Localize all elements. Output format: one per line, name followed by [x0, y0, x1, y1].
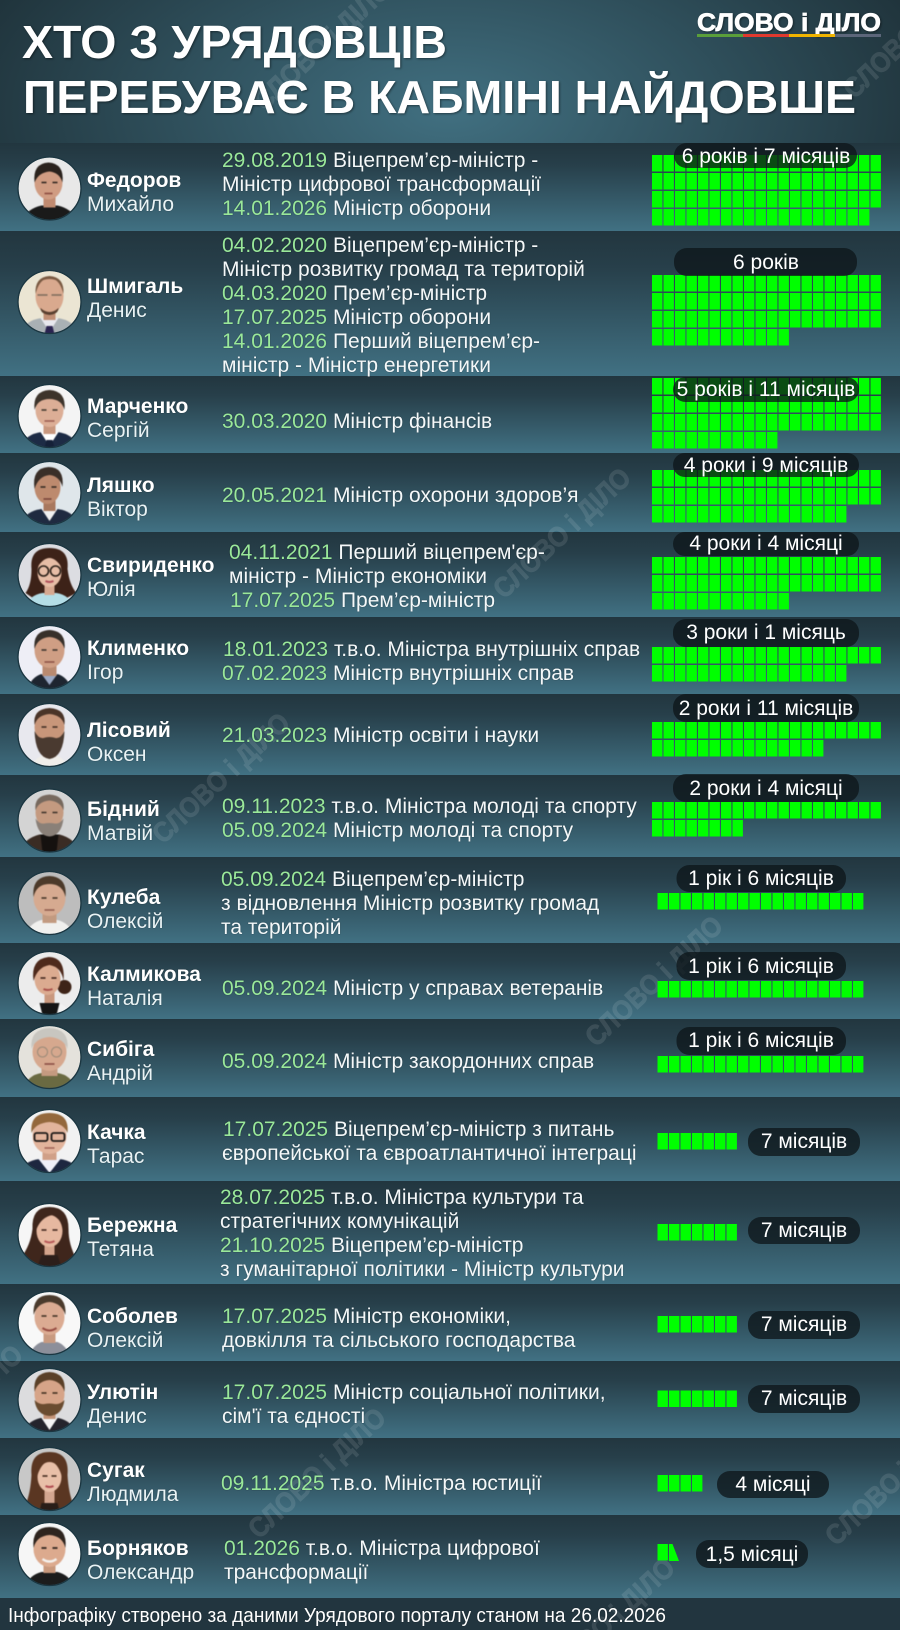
name — [87, 395, 188, 442]
tenure bar: 7 months: 7 місяців — [761, 1219, 847, 1242]
name: Тарас — [87, 1145, 144, 1168]
name: Бережна — [87, 1214, 178, 1237]
name — [87, 886, 163, 933]
row: Улютін — [17, 1368, 860, 1432]
appointments: 17.07.2025 Віцепрем’єр-міністр з питань — [223, 1118, 615, 1141]
appointments: міністр - Міністр енергетики — [222, 354, 491, 377]
appointments: сім'ї та єдності — [222, 1405, 365, 1428]
name — [87, 719, 171, 766]
tenure bar: 28 months: 2 роки і 4 місяці — [689, 777, 843, 800]
name: Кулеба — [87, 886, 161, 909]
row: Качка — [17, 1109, 860, 1174]
name: Соболев — [87, 1305, 178, 1328]
tenure bar: 7 months — [658, 1311, 860, 1339]
name: Віктор — [87, 498, 148, 521]
tenure bar: 28 months — [652, 774, 881, 828]
row: Калмикова — [17, 951, 864, 1016]
name: Оксен — [87, 743, 147, 766]
appointments: 17.07.2025 Міністр соціальної політики, — [222, 1381, 606, 1404]
appointments: 28.07.2025 т.в.о. Міністра культури та — [220, 1186, 584, 1209]
row: Борняков — [18, 1522, 808, 1586]
tenure bar: 71 months — [652, 377, 881, 440]
tenure bar: 57 months — [652, 453, 881, 514]
appointments — [222, 795, 637, 842]
watermarks: СЛОВО і ДІЛО — [487, 462, 637, 604]
appointments: 05.09.2024 Міністр молоді та спорту — [222, 819, 574, 842]
name: Денис — [87, 299, 147, 322]
appointments: 05.09.2024 Віцепрем’єр-міністр — [221, 868, 524, 891]
row: Бідний — [0, 774, 900, 857]
name: Шмигаль — [87, 275, 183, 298]
tenure bar: 79 months — [652, 143, 881, 217]
appointments — [220, 1186, 624, 1281]
appointments: 04.02.2020 Віцепрем’єр-міністр - — [222, 234, 538, 257]
tenure bar: 1.5 months: 1,5 місяці — [706, 1543, 798, 1566]
appointments — [224, 1537, 540, 1584]
tenure bar: 7 months — [658, 1385, 860, 1413]
appointments — [221, 868, 599, 939]
name: Качка — [87, 1121, 146, 1144]
appointments: 17.07.2025 Міністр оборони — [222, 306, 491, 329]
name: Сергій — [87, 419, 150, 442]
appointments — [222, 638, 640, 685]
tenure bar: 18 months — [658, 865, 864, 901]
tenure bar: 52 months — [652, 532, 881, 601]
row: Ляшко — [17, 453, 881, 526]
footer source note: Інфографіку створено за даними Урядового порталу станом на 26.02.2026 — [8, 1605, 666, 1627]
name: Свириденко — [87, 554, 214, 577]
name: Улютін — [87, 1381, 158, 1404]
row: Марченко — [17, 377, 881, 448]
avatar: Сугак — [18, 1447, 82, 1511]
appointments: та територій — [221, 916, 342, 939]
appointments: 29.08.2019 Віцепрем’єр-міністр - — [222, 149, 538, 172]
name — [87, 1381, 158, 1428]
avatar: Сибіга — [18, 1025, 82, 1089]
appointments: 04.11.2021 Перший віцепрем'єр- — [229, 541, 545, 564]
appointments: 01.2026 т.в.о. Міністра цифрової — [224, 1537, 540, 1560]
row: Бережна — [17, 1188, 860, 1281]
name: Андрій — [87, 1062, 153, 1085]
tenure bar: 4 months — [658, 1471, 829, 1498]
watermarks: СЛОВО і ДІЛО — [242, 1402, 392, 1544]
tenure bar: 37 months — [652, 619, 881, 673]
tenure bar: 72 months — [652, 248, 881, 337]
tenure bar: 18 months: 1 рік і 6 місяців — [688, 955, 834, 978]
tenure bar: 7 months: 7 місяців — [761, 1130, 847, 1153]
appointments: стратегічних комунікацій — [220, 1210, 459, 1233]
appointments — [229, 541, 545, 612]
avatar: Ляшко — [18, 461, 82, 525]
tenure bar: 1.5 months — [658, 1540, 808, 1568]
title: ХТО З УРЯДОВЦІВ — [22, 16, 447, 68]
name: Людмила — [87, 1483, 179, 1506]
name: Олексій — [87, 910, 163, 933]
appointments — [222, 149, 541, 220]
appointments: Міністр цифрової трансформації — [222, 173, 541, 196]
name: Бідний — [87, 798, 160, 821]
name — [87, 1459, 179, 1506]
title — [22, 16, 856, 123]
name: Олександр — [87, 1561, 194, 1584]
appointments — [222, 234, 585, 377]
row: Свириденко — [0, 532, 900, 617]
avatar: Клименко — [18, 625, 82, 689]
avatar: Лісовий — [18, 703, 82, 767]
avatar: Марченко — [18, 384, 82, 448]
appointments — [222, 1305, 576, 1352]
appointments: 17.07.2025 Прем’єр-міністр — [230, 589, 495, 612]
appointments: 21.10.2025 Віцепрем’єр-міністр — [220, 1234, 523, 1257]
appointments: європейської та євроатлантичної інтеграці — [222, 1142, 637, 1165]
avatar: Бідний — [18, 788, 82, 852]
row: Шмигаль — [0, 231, 900, 377]
tenure bar: 18 months: 1 рік і 6 місяців — [688, 1029, 834, 1052]
watermarks: СЛОВО і ДІЛО — [579, 910, 729, 1052]
row: Клименко — [17, 619, 881, 690]
appointments: 04.03.2020 Прем’єр-міністр — [222, 282, 487, 305]
tenure bar: 7 months: 7 місяців — [761, 1313, 847, 1336]
name — [87, 474, 155, 521]
appointments: 09.11.2023 т.в.о. Міністра молоді та спорту — [222, 795, 637, 818]
avatar: Борняков — [18, 1522, 82, 1586]
avatar: Федоров — [18, 156, 82, 220]
tenure bar: 7 months — [658, 1217, 860, 1244]
watermarks: СЛОВО і ДІЛО — [146, 707, 296, 849]
appointments: з гуманітарної політики - Міністр культури — [220, 1258, 624, 1281]
logo: Слово і Діло: СЛОВО і ДІЛО — [697, 9, 881, 37]
avatar: Кулеба — [18, 871, 82, 935]
name: Борняков — [87, 1537, 189, 1560]
name: Наталія — [87, 987, 163, 1010]
appointments — [222, 1118, 637, 1165]
name: Олексій — [87, 1329, 163, 1352]
tenure bar: 52 months: 4 роки і 4 місяці — [689, 532, 843, 555]
tenure bar: 18 months — [658, 1027, 864, 1064]
row: Соболев — [17, 1291, 860, 1356]
name — [87, 275, 183, 322]
name: Юлія — [87, 578, 136, 601]
tenure bar: 57 months: 4 роки і 9 місяців — [684, 454, 848, 477]
row: Кулеба — [17, 865, 864, 939]
row: Лісовий — [17, 694, 881, 768]
avatar: Бережна — [18, 1203, 82, 1267]
name — [87, 798, 160, 845]
name: Федоров — [87, 169, 181, 192]
avatar: Калмикова — [18, 951, 82, 1015]
row: Федоров — [0, 143, 900, 231]
tenure bar: 4 months: 4 місяці — [735, 1473, 811, 1496]
name — [87, 1214, 178, 1261]
name: Тетяна — [87, 1238, 154, 1261]
avatar: Свириденко — [18, 543, 82, 607]
tenure bar: 18 months — [658, 952, 864, 989]
appointments: 18.01.2023 т.в.о. Міністра внутрішніх справ — [223, 638, 640, 661]
footer background — [0, 1598, 900, 1630]
name — [87, 1121, 146, 1168]
name: Марченко — [87, 395, 188, 418]
appointments: 20.05.2021 Міністр охорони здоров’я — [222, 484, 579, 507]
appointments: 05.09.2024 Міністр закордонних справ — [222, 1050, 594, 1073]
name: Сибіга — [87, 1038, 155, 1061]
appointments: з відновлення Міністр розвитку громад — [221, 892, 599, 915]
appointments: 30.03.2020 Міністр фінансів — [222, 410, 492, 433]
appointments: 09.11.2025 т.в.о. Міністра юстиції — [221, 1472, 542, 1495]
tenure bar: 72 months: 6 років — [733, 251, 799, 274]
tenure bar: 7 months — [658, 1128, 860, 1156]
tenure bar: 35 months: 2 роки і 11 місяців — [679, 697, 853, 720]
appointments: довкілля та сільського господарства — [222, 1329, 576, 1352]
tenure bar: 37 months: 3 роки і 1 місяць — [686, 621, 846, 644]
appointments: 14.01.2026 Міністр оборони — [222, 197, 491, 220]
appointments: 21.03.2023 Міністр освіти і науки — [222, 724, 539, 747]
name: Ляшко — [87, 474, 155, 497]
row: Сугак — [17, 1447, 829, 1512]
name: Денис — [87, 1405, 147, 1428]
name: Лісовий — [87, 719, 171, 742]
name — [87, 1305, 178, 1352]
appointments: міністр - Міністр економіки — [229, 565, 487, 588]
name — [87, 554, 214, 601]
name: Калмикова — [87, 963, 201, 986]
tenure bar: 18 months: 1 рік і 6 місяців — [688, 867, 834, 890]
name — [87, 1038, 155, 1085]
appointments: 07.02.2023 Міністр внутрішніх справ — [222, 662, 574, 685]
name — [87, 637, 189, 684]
title: ПЕРЕБУВАЄ В КАБМІНІ НАЙДОВШЕ — [23, 71, 856, 123]
appointments: 14.01.2026 Перший віцепрем’єр- — [222, 330, 540, 353]
appointments: трансформації — [224, 1561, 369, 1584]
name: Матвій — [87, 822, 153, 845]
avatar: Качка — [18, 1109, 82, 1173]
tenure bar: 35 months — [652, 694, 881, 748]
row: Сибіга — [18, 1025, 864, 1090]
appointments — [222, 1381, 606, 1428]
avatar: Соболев — [18, 1291, 82, 1355]
tenure bar: 71 months: 5 років і 11 місяців — [677, 378, 855, 401]
name — [87, 963, 201, 1010]
name — [87, 1537, 194, 1584]
appointments: Міністр розвитку громад та територій — [222, 258, 585, 281]
appointments: 05.09.2024 Міністр у справах ветеранів — [222, 977, 603, 1000]
appointments: 17.07.2025 Міністр економіки, — [222, 1305, 511, 1328]
tenure bar: 79 months: 6 років і 7 місяців — [682, 145, 850, 168]
name: Ігор — [87, 661, 123, 684]
name: Михайло — [87, 193, 174, 216]
name: Сугак — [87, 1459, 145, 1482]
name: Клименко — [87, 637, 189, 660]
header background — [0, 0, 900, 143]
name — [87, 169, 181, 216]
avatar: Улютін — [18, 1368, 82, 1432]
tenure bar: 7 months: 7 місяців — [761, 1387, 847, 1410]
avatar: Шмигаль — [18, 270, 82, 334]
